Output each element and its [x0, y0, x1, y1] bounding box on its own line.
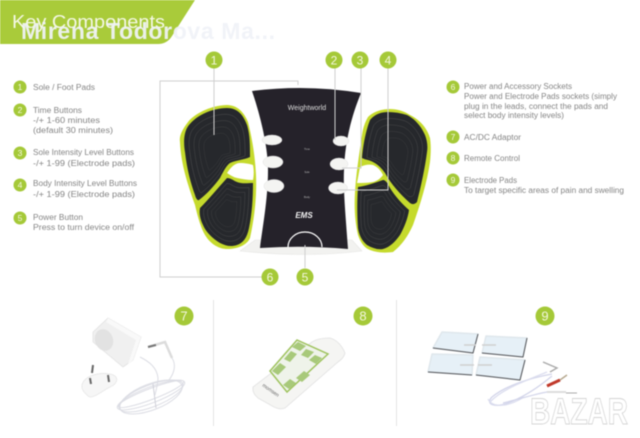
electrode pads: [428, 332, 527, 380]
adaptor cables: [115, 357, 187, 421]
legend item 4: [14, 178, 137, 199]
legend item 3: 3: [18, 148, 23, 158]
control panel: Time: [304, 147, 310, 151]
legend item 8: 8: [451, 153, 456, 163]
badge 3: 3: [357, 54, 364, 68]
badge 6: [262, 268, 278, 286]
legend item 9: [446, 174, 624, 195]
legend item 2: -/+ 1-60 minutes: [33, 116, 100, 125]
badge 7: 7: [180, 308, 188, 324]
control panel: EMS: [295, 211, 313, 220]
title banner: Key Components: [12, 11, 165, 32]
legend item 6: plug in the leads, connect the pads and: [464, 102, 608, 111]
legend item 9: To target specific areas of pain and swelling: [464, 186, 624, 195]
electrode cables: [488, 362, 577, 405]
adaptor jack: [148, 342, 172, 358]
badge 2: 2: [331, 54, 338, 68]
legend item 3: Sole Intensity Level Buttons: [33, 148, 134, 157]
legend item 4: 4: [18, 180, 23, 190]
legend item 1: 1: [18, 82, 23, 92]
legend item 2: [14, 104, 113, 135]
panel: remote control: [253, 306, 372, 409]
device base: [240, 240, 362, 254]
legend item 7: AC/DC Adaptor: [464, 133, 521, 142]
badge 1: 1: [211, 54, 218, 68]
legend item 6: Power and Electrode Pads sockets (simply: [464, 92, 617, 101]
callout lines: [160, 68, 388, 277]
legend item 6: select body intensity levels): [464, 111, 564, 120]
legend item 6: [446, 80, 617, 120]
legend: left list: [14, 80, 137, 232]
legend item 4: Body Intensity Level Buttons: [33, 179, 137, 188]
adaptor body: [93, 318, 141, 367]
left foot pad: [180, 105, 256, 249]
badge 8: 8: [359, 308, 367, 324]
legend item 1: Sole / Foot Pads: [33, 83, 95, 92]
badge 6: 6: [267, 270, 274, 284]
legend item 2: Time Buttons: [33, 106, 82, 115]
legend item 5: Power Button: [33, 213, 83, 222]
control panel: [252, 88, 361, 249]
badge 5: 5: [302, 270, 309, 284]
legend item 9: Electrode Pads: [464, 176, 517, 185]
control panel: Weightworld: [288, 105, 326, 112]
legend item 5: Press to turn device on/off: [33, 223, 135, 232]
panel: electrode pads: [428, 306, 577, 405]
legend item 3: -/+ 1-99 (Electrode pads): [33, 159, 135, 168]
badge 4: [380, 52, 396, 68]
legend item 4: -/+ 1-99 (Electrode pads): [33, 190, 135, 199]
title banner: [0, 0, 195, 44]
control panel: Sole: [304, 170, 310, 174]
badge 9: [536, 306, 554, 326]
legend item 6: 6: [451, 82, 456, 92]
legend item 1: [14, 80, 95, 94]
badge 2: [326, 52, 342, 68]
legend item 8: [446, 152, 520, 164]
panel: AC/DC adaptor: [82, 306, 194, 421]
legend item 5: [14, 212, 135, 232]
callout badges: [206, 52, 396, 286]
legend item 9: 9: [451, 175, 456, 185]
legend item 3: [14, 146, 135, 168]
control panel: Body: [304, 195, 311, 199]
watermark name: Mirena Todorova Ma...: [21, 18, 275, 44]
pad connectors: [460, 345, 496, 365]
plug attachment: [82, 365, 117, 397]
legend item 2: (default 30 minutes): [33, 126, 113, 135]
badge 4: 4: [385, 54, 392, 68]
remote keypad: momsen: [261, 383, 280, 399]
panel buttons: [262, 135, 349, 194]
legend item 7: [446, 130, 521, 144]
badge 9: 9: [541, 308, 549, 324]
remote body: [253, 338, 345, 409]
legend item 5: 5: [18, 213, 23, 223]
dividers: [214, 300, 396, 426]
legend item 6: Power and Accessory Sockets: [464, 82, 572, 91]
badge 1: [206, 52, 222, 68]
badge 5: [296, 268, 314, 286]
legend: right list: [446, 80, 624, 195]
badge 3: [352, 52, 368, 68]
legend item 8: Remote Control: [464, 154, 520, 163]
right foot pad: [355, 109, 431, 253]
device: foot massager: [180, 88, 431, 254]
legend item 2: 2: [18, 105, 23, 115]
legend item 7: 7: [451, 132, 456, 142]
